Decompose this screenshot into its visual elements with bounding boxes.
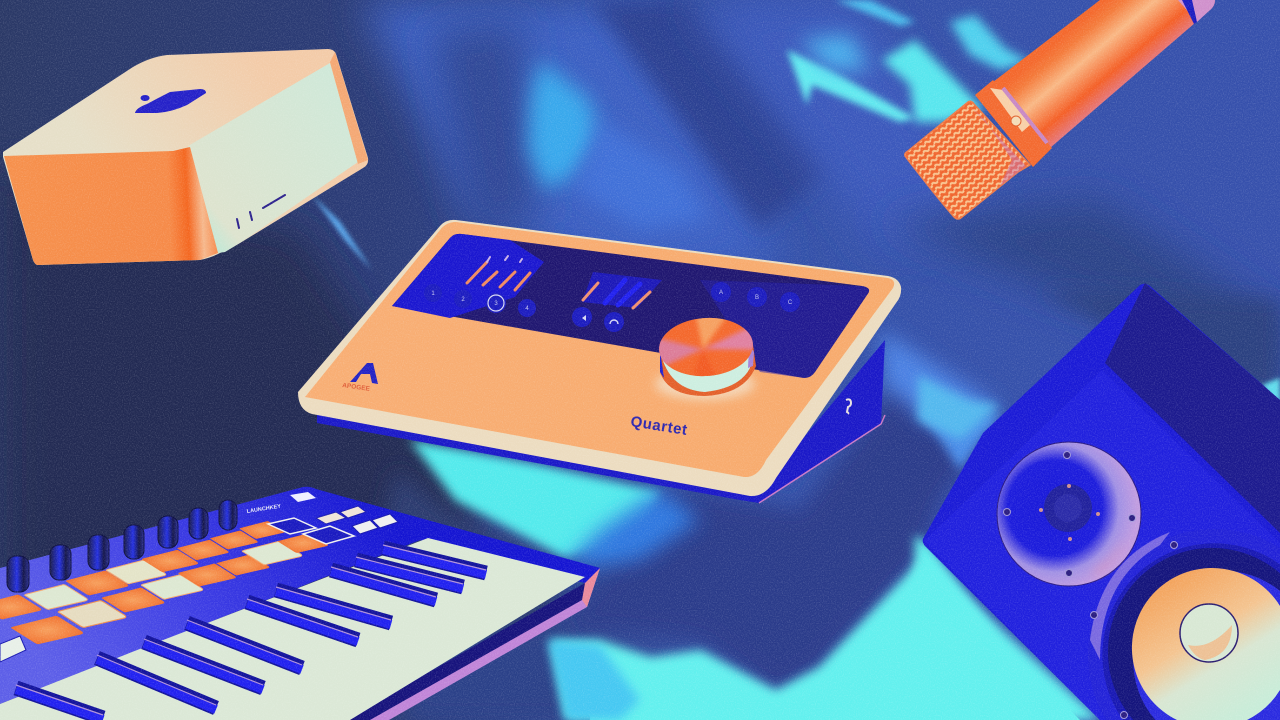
control buttons: A	[719, 290, 723, 296]
logo: Apogee: APOGEE	[342, 382, 371, 393]
volume knob	[651, 318, 759, 406]
label: Launchkey branding: LAUNCHKEY	[246, 504, 282, 515]
icon: apple logo	[135, 89, 206, 113]
buttons	[0, 506, 398, 662]
background: cyan light patches	[312, 0, 1280, 720]
icon: orange microphone	[905, 0, 1215, 219]
woofer	[1088, 529, 1280, 720]
rotary knobs	[7, 500, 237, 592]
logo: keyboard maker mark	[290, 492, 316, 502]
control buttons	[424, 282, 800, 332]
icon: MIDI keyboard controller	[0, 487, 600, 720]
icon: blue studio monitor speaker	[923, 283, 1280, 720]
icon: Mac Studio computer	[3, 49, 368, 265]
control buttons: C	[788, 300, 793, 306]
ports	[237, 195, 285, 228]
drum pads	[0, 521, 328, 644]
mic band	[975, 80, 1052, 167]
meters: input levels	[467, 256, 530, 290]
meters: output levels	[583, 280, 650, 308]
label: Quartet: Quartet	[629, 413, 689, 439]
tweeter	[997, 442, 1141, 586]
control buttons: 4	[525, 306, 529, 312]
logo: Apogee	[342, 363, 378, 393]
icon: Apogee Quartet audio interface	[298, 220, 901, 503]
control buttons: 3	[494, 301, 498, 307]
control buttons: 1	[431, 291, 435, 297]
headphone jack	[846, 399, 851, 414]
mic grille	[905, 101, 1030, 219]
piano keys	[16, 545, 486, 720]
control buttons: 2	[461, 297, 465, 303]
control buttons: B	[755, 295, 759, 301]
